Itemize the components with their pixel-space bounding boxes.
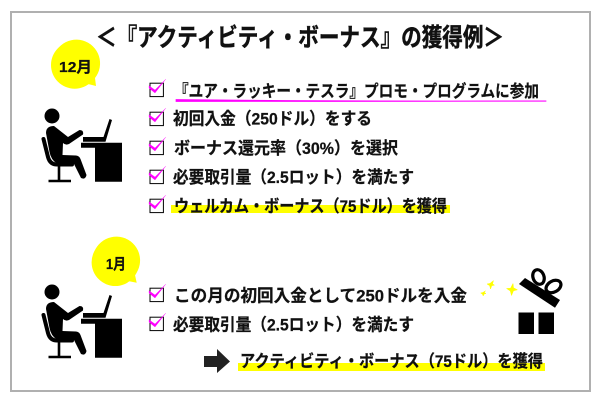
step 5: ウェルカム・ボーナス（75ドル）を獲得 [174,197,447,216]
icon: person at desk [44,108,122,182]
step 2: 必要取引量（2.5ロット）を満たす [173,314,414,334]
icon: arrow [204,349,230,373]
highlight: pink underline [176,100,546,102]
checkbox 1 [149,284,166,302]
panel: December [44,40,546,216]
result: bonus earned: アクティビティ・ボーナス（75ドル）を獲得 [240,351,543,371]
bubble: 12月: 12月 [59,59,92,76]
panel: January [44,237,563,373]
step 3: ボーナス還元率（30%）を選択 [174,139,398,158]
checkbox 3 [149,137,166,155]
icon: person at desk [44,284,122,358]
checkbox 4 [149,166,166,184]
step 1: 『ユア・ラッキー・テスラ』プロモ・プログラムに参加 [174,81,539,101]
bubble: 12月 [51,40,100,89]
step 2: 初回入金（250ドル）をする [173,108,372,128]
step 4: 必要取引量（2.5ロット）を満たす [173,167,414,187]
icon: sparkles [481,280,518,296]
icon: gift box [518,268,563,334]
step 1: この月の初回入金として250ドルを入金 [174,286,467,306]
bubble: 1月 [92,237,140,286]
highlight: yellow marker [171,205,450,213]
bubble: 1月: 1月 [106,256,126,273]
checkbox 2 [149,313,166,331]
checkbox 1 [149,79,166,97]
checklist: December steps [149,79,546,216]
checkbox 5 [149,195,166,213]
title: ＜『アクティビティ・ボーナス』の獲得例＞ [96,24,504,52]
checkbox 2 [149,108,166,126]
checklist: January steps [149,284,467,334]
